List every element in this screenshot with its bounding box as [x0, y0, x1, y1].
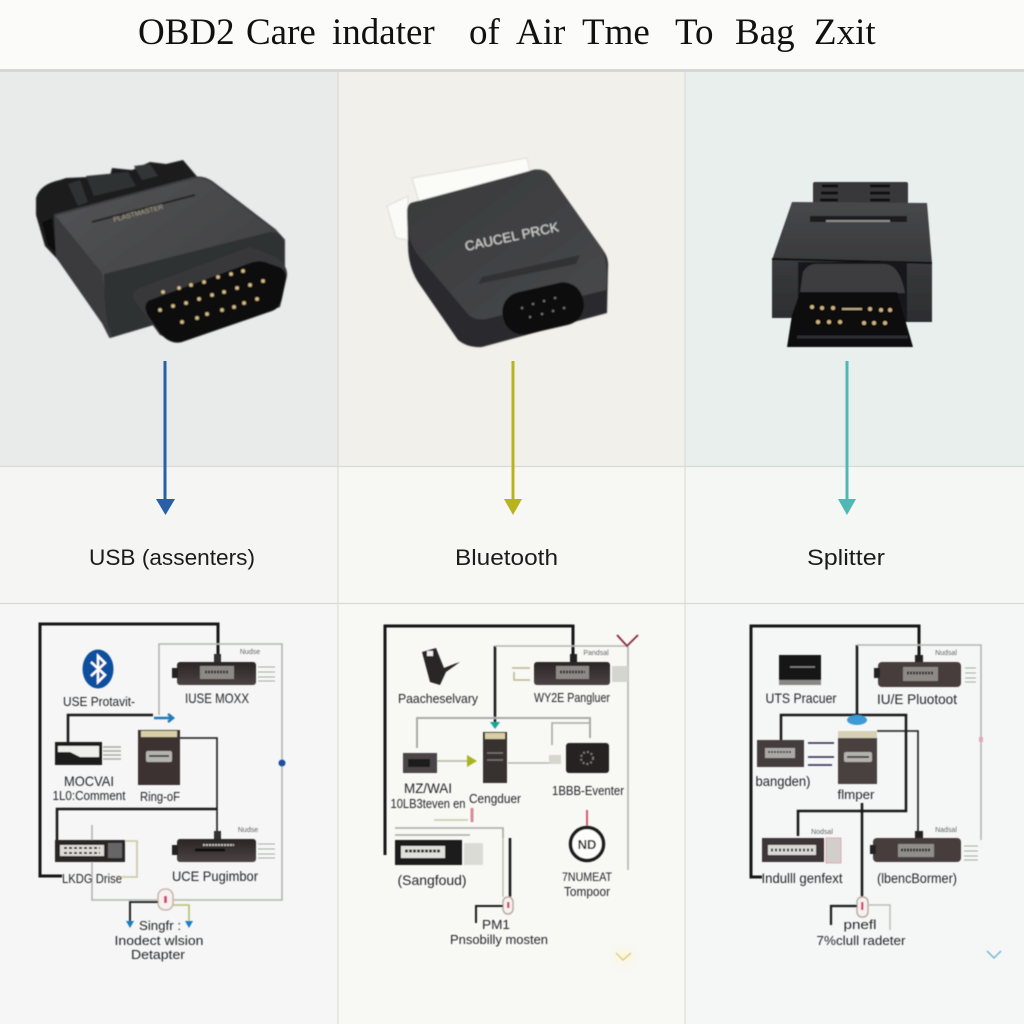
icon: ND gauge: ND: [578, 837, 596, 852]
label: Indulll genfext: [762, 870, 843, 886]
device: top right: [874, 650, 976, 687]
label: Inodect wlsion: [114, 933, 204, 948]
title: Care: [246, 12, 316, 53]
device: gear box: [549, 743, 609, 773]
wiring diagram: Splitter: [751, 626, 1001, 958]
column label: Bluetooth: Bluetooth: [455, 545, 558, 570]
device: left: [403, 753, 437, 773]
red chevron: [617, 635, 638, 646]
arrow: Bluetooth: [504, 361, 522, 515]
label: MOCVAI: [64, 773, 114, 789]
column label: Splitter: Splitter: [807, 545, 885, 570]
device: top right: Pandsal: [583, 650, 609, 657]
device: lower left: [762, 829, 841, 863]
icon: bluetooth: [82, 650, 114, 688]
device: screen: [779, 655, 821, 685]
device: lower right: Nudse: [238, 827, 258, 834]
device: left: [55, 742, 121, 765]
icon: plug: [422, 648, 460, 685]
title: of: [469, 12, 500, 53]
device: lower right: Nadsal: [935, 827, 957, 834]
connector photo: USB adapter: [36, 160, 287, 343]
connector label: CAUCEL PRCK: [464, 219, 560, 254]
device: top right: [512, 650, 628, 685]
device: lower right: [870, 827, 978, 862]
connector photo: Bluetooth adapter: [387, 158, 608, 347]
device: central: [138, 730, 180, 785]
label: flmper: [838, 787, 875, 802]
label: pnefl: [844, 917, 877, 932]
label: WY2E Pangluer: [534, 690, 611, 705]
bottom wires: [126, 902, 193, 928]
label: Cengduer: [469, 791, 522, 806]
title band: [0, 0, 1024, 72]
label: UCE Pugimbor: [172, 868, 258, 884]
label: LKDG Drise: [62, 871, 122, 886]
label: 7NUMEAT: [562, 870, 613, 884]
device: lower left: Nodsal: [811, 829, 833, 836]
arrow: Splitter: [838, 361, 856, 515]
label: 1BBB-Eventer: [552, 783, 625, 798]
short arrows: [808, 743, 834, 765]
label: IUSE MOXX: [185, 690, 250, 706]
title: Tme: [582, 12, 650, 53]
label: UTS Pracuer: [766, 690, 837, 706]
device: top right: [172, 649, 275, 685]
title: Air: [516, 12, 565, 53]
device: left: [757, 740, 804, 767]
label: Pnsobilly mosten: [450, 932, 548, 947]
teal marker: [490, 722, 500, 729]
label: Singfr :: [139, 918, 181, 933]
label: 1L0:Comment: [52, 788, 126, 803]
label: IU/E Pluotoot: [877, 691, 957, 707]
label: bangden): [756, 773, 810, 789]
yellow chevron: [606, 939, 642, 975]
arrow: USB: [156, 361, 175, 515]
connector label: PLASTMASTER: [113, 204, 164, 224]
label: USE Protavit-: [63, 694, 135, 709]
blue chevron: [987, 951, 1001, 958]
device: top right: Nudsal: [935, 650, 957, 657]
title: To: [675, 12, 714, 53]
device: lower left: [395, 840, 483, 865]
label: 7%clull radeter: [816, 933, 906, 948]
bottom wire: [476, 906, 503, 923]
icon: lock: [503, 897, 513, 914]
device: central: [483, 732, 507, 783]
label: Paacheselvary: [398, 691, 478, 706]
blue double arrow: [154, 714, 173, 722]
pink marker: [979, 737, 983, 742]
wiring diagram: Bluetooth: [385, 626, 642, 975]
label: Tompoor: [564, 884, 611, 899]
device: central: [838, 731, 877, 784]
label: MZ/WAI: [404, 780, 452, 796]
label: Detapter: [131, 947, 186, 962]
title: indater: [332, 12, 435, 53]
blue cluster: [847, 715, 867, 725]
device: lower right: [172, 827, 275, 862]
device: lower left: [55, 840, 125, 862]
icon: lock: [857, 897, 868, 917]
label: Ring-oF: [140, 789, 180, 804]
title: Zxit: [814, 12, 876, 53]
label: (Sangfoud): [398, 872, 466, 888]
column label: USB: USB (assenters): [89, 545, 255, 570]
green arrow: [437, 755, 477, 767]
title: Bag: [735, 12, 795, 53]
connector photo: Splitter adapter: [772, 182, 932, 347]
label: 10LB3teven en: [390, 796, 466, 811]
icon: lock: [158, 889, 173, 910]
title: OBD2: [138, 12, 235, 53]
blue dot: [278, 760, 286, 766]
label: (lbencBormer): [877, 870, 957, 886]
device: top right: Nudse: [240, 649, 260, 656]
icon: ND gauge: [570, 810, 604, 860]
label: PM1: [482, 917, 510, 932]
bottom wires: [831, 905, 890, 930]
wiring diagram: USB: [40, 624, 286, 962]
